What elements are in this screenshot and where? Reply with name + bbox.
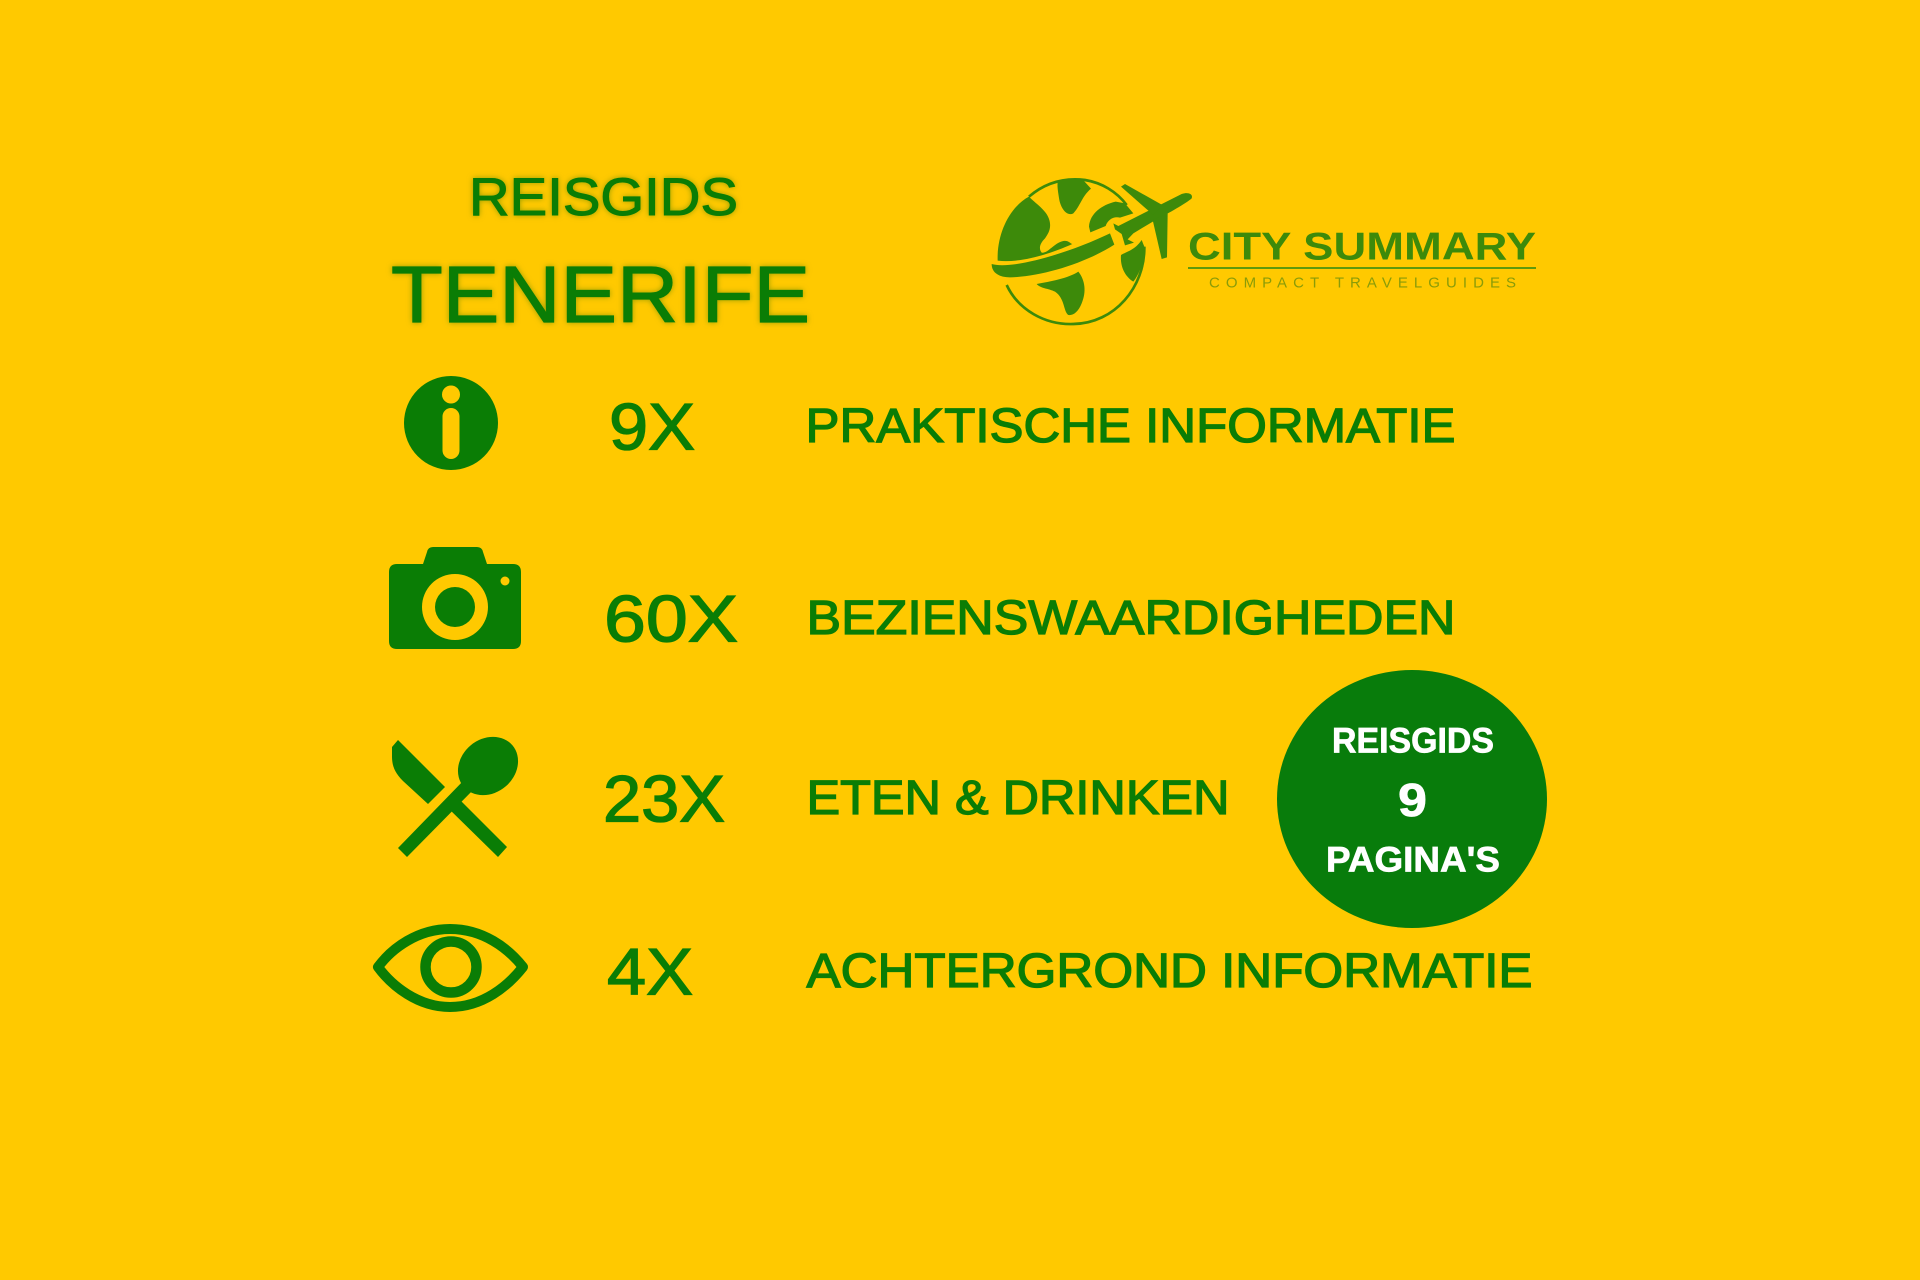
logo icon: globe with plane <box>992 179 1192 324</box>
title: Tenerife: TENERIFE <box>391 250 810 339</box>
label: achtergrond informatie: ACHTERGROND INFORMATIE <box>806 945 1532 998</box>
count: 60X: 60X <box>604 582 738 656</box>
logo tagline: COMPACT TRAVELGUIDES <box>1209 274 1516 292</box>
logo rule <box>1188 267 1536 269</box>
row: praktische informatie <box>404 376 1456 470</box>
badge: 9 pagina's <box>1277 670 1547 928</box>
icon: knife and spoon <box>392 725 530 857</box>
row: achtergrond informatie <box>378 929 1532 1008</box>
logo name: CITY SUMMARY <box>1188 226 1536 268</box>
icon: camera <box>389 547 521 649</box>
icon: info <box>404 376 498 470</box>
badge line: reisgids: REISGIDS <box>1332 722 1494 760</box>
count: 4X: 4X <box>607 934 693 1008</box>
badge number: 9 <box>1398 774 1427 826</box>
icon: eye <box>378 929 523 1007</box>
row: bezienswaardigheden <box>389 547 1456 656</box>
count: 9X: 9X <box>609 390 695 464</box>
label: praktische informatie: PRAKTISCHE INFORMATIE <box>806 400 1456 453</box>
count: 23X: 23X <box>603 762 725 836</box>
label: bezienswaardigheden: BEZIENSWAARDIGHEDEN <box>806 592 1456 645</box>
heading: reisgids: REISGIDS <box>469 168 738 227</box>
label: eten en drinken: ETEN & DRINKEN <box>806 772 1230 825</box>
badge line: pagina's: PAGINA'S <box>1326 840 1500 880</box>
logo: City Summary <box>992 179 1536 324</box>
row: eten en drinken <box>392 725 1230 857</box>
